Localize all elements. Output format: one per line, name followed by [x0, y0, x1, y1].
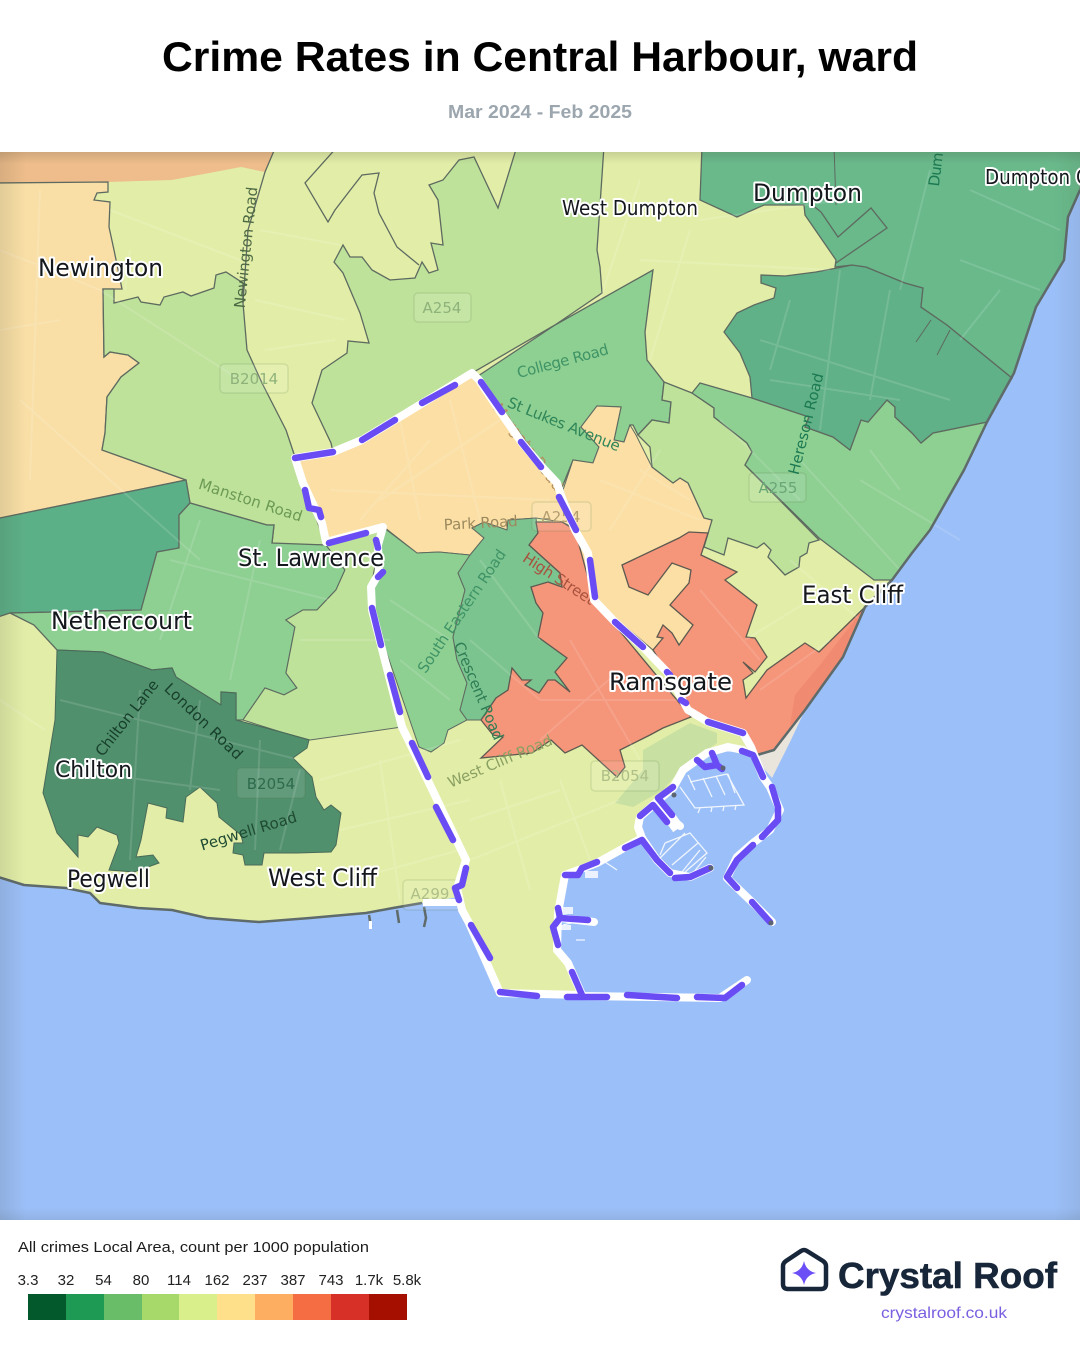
road shields: A254	[423, 299, 461, 317]
brand logo block	[780, 1248, 1058, 1322]
place labels: East Cliff	[802, 581, 903, 609]
icon: house with star	[783, 1250, 826, 1289]
ward: east green	[692, 383, 987, 580]
place labels: Newington	[38, 254, 163, 282]
choropleth map	[0, 152, 1080, 1220]
road names: Margate Road	[489, 400, 567, 494]
marina pontoons	[563, 774, 744, 940]
sea	[0, 152, 1080, 1220]
legend tick values: 3.3	[18, 1272, 38, 1289]
ward: High Street green	[453, 518, 570, 720]
subtitle: date range: Mar 2024 - Feb 2025	[448, 102, 632, 122]
ward boundary: purple dashes	[295, 382, 778, 998]
ward: South Eastern Road green	[371, 528, 470, 752]
road shields: B2014	[230, 370, 278, 388]
ward: east light green	[638, 382, 819, 575]
ward: St Lawrence south light green	[243, 529, 402, 740]
road shields: A299	[411, 885, 449, 903]
legend tick values: 54	[95, 1272, 112, 1289]
road names: Hereson Road	[785, 371, 827, 476]
legend tick values: 237	[242, 1272, 268, 1289]
legend tick values: 5.8k	[393, 1272, 422, 1289]
road shields	[220, 293, 806, 910]
ward: west dark green	[0, 480, 190, 618]
place labels: Pegwell	[67, 865, 150, 893]
website url: crystalroof.co.uk	[881, 1305, 1008, 1322]
marina quays	[369, 815, 683, 930]
road names: Dum	[925, 152, 947, 187]
road names: Crescent Road	[450, 639, 507, 743]
ward: College Road green	[478, 270, 671, 490]
legend tick values: 1.7k	[355, 1272, 384, 1289]
ward: A254 light green	[312, 146, 604, 452]
marina land	[615, 723, 717, 807]
legend tick values: 80	[133, 1272, 149, 1289]
place labels: Ramsgate	[609, 668, 732, 696]
road names: High Street	[519, 549, 598, 609]
road names: London Road	[161, 680, 246, 763]
road names: Park Road	[443, 512, 518, 534]
ward: Newington	[0, 182, 186, 519]
place labels: Chilton	[55, 758, 132, 783]
ward: Dumpton green	[700, 146, 1080, 378]
land base	[0, 146, 1080, 995]
road shields: B2054	[601, 767, 649, 785]
ward: Chilton darkest green	[43, 650, 341, 872]
ward: top left orange	[0, 146, 276, 183]
road shields: A255	[759, 479, 797, 497]
legend tick values: 114	[167, 1272, 191, 1289]
legend tick values: 32	[58, 1272, 74, 1289]
legend tick values	[18, 1272, 422, 1289]
road names: Pegwell Road	[198, 808, 299, 854]
legend	[18, 1239, 422, 1320]
street network	[0, 170, 1060, 900]
ward: Ramsgate red west	[481, 522, 691, 777]
title: Crime Rates in Central Harbour, ward	[162, 33, 918, 80]
road names: Newington Road	[231, 186, 261, 309]
road shields: B2054	[247, 775, 295, 793]
pier tips	[672, 766, 774, 926]
place labels: West Cliff	[268, 864, 377, 892]
ward: central orange west	[296, 373, 572, 555]
legend title: All crimes Local Area, count per 1000 population	[18, 1239, 369, 1256]
ward: central orange east	[563, 406, 712, 650]
place labels: St. Lawrence	[238, 544, 384, 572]
road names: Manston Road	[196, 475, 305, 525]
road names: College Road	[515, 340, 610, 382]
ward: Nethercourt green	[10, 503, 345, 720]
place labels: Nethercourt	[51, 607, 192, 635]
road names: South Eastern Road	[414, 546, 510, 676]
road names: West Cliff Road	[445, 731, 555, 792]
edge fade	[0, 152, 1080, 1220]
coastal shading	[790, 607, 865, 726]
wordmark: Crystal Roof	[838, 1255, 1058, 1296]
legend colour scale	[28, 1294, 407, 1320]
ward: Hereson dark green	[724, 265, 1012, 450]
ward detail lines	[243, 146, 950, 355]
legend tick values: 162	[204, 1272, 230, 1289]
place labels: West Dumpton	[562, 196, 698, 220]
ward boundary: white casing	[295, 373, 780, 998]
ward: north west light green	[102, 272, 326, 545]
ward: Ramsgate red east	[622, 532, 865, 755]
road names	[92, 151, 947, 854]
place labels: Dumpton	[753, 179, 862, 207]
road shields: A254	[542, 508, 580, 526]
place labels	[38, 165, 1080, 893]
road names: Chilton Lane	[92, 676, 162, 760]
road names: St Lukes Avenue	[505, 394, 623, 455]
legend tick values: 743	[318, 1272, 344, 1289]
legend tick values: 387	[280, 1272, 306, 1289]
coastline	[0, 190, 1080, 927]
beach	[757, 710, 805, 778]
